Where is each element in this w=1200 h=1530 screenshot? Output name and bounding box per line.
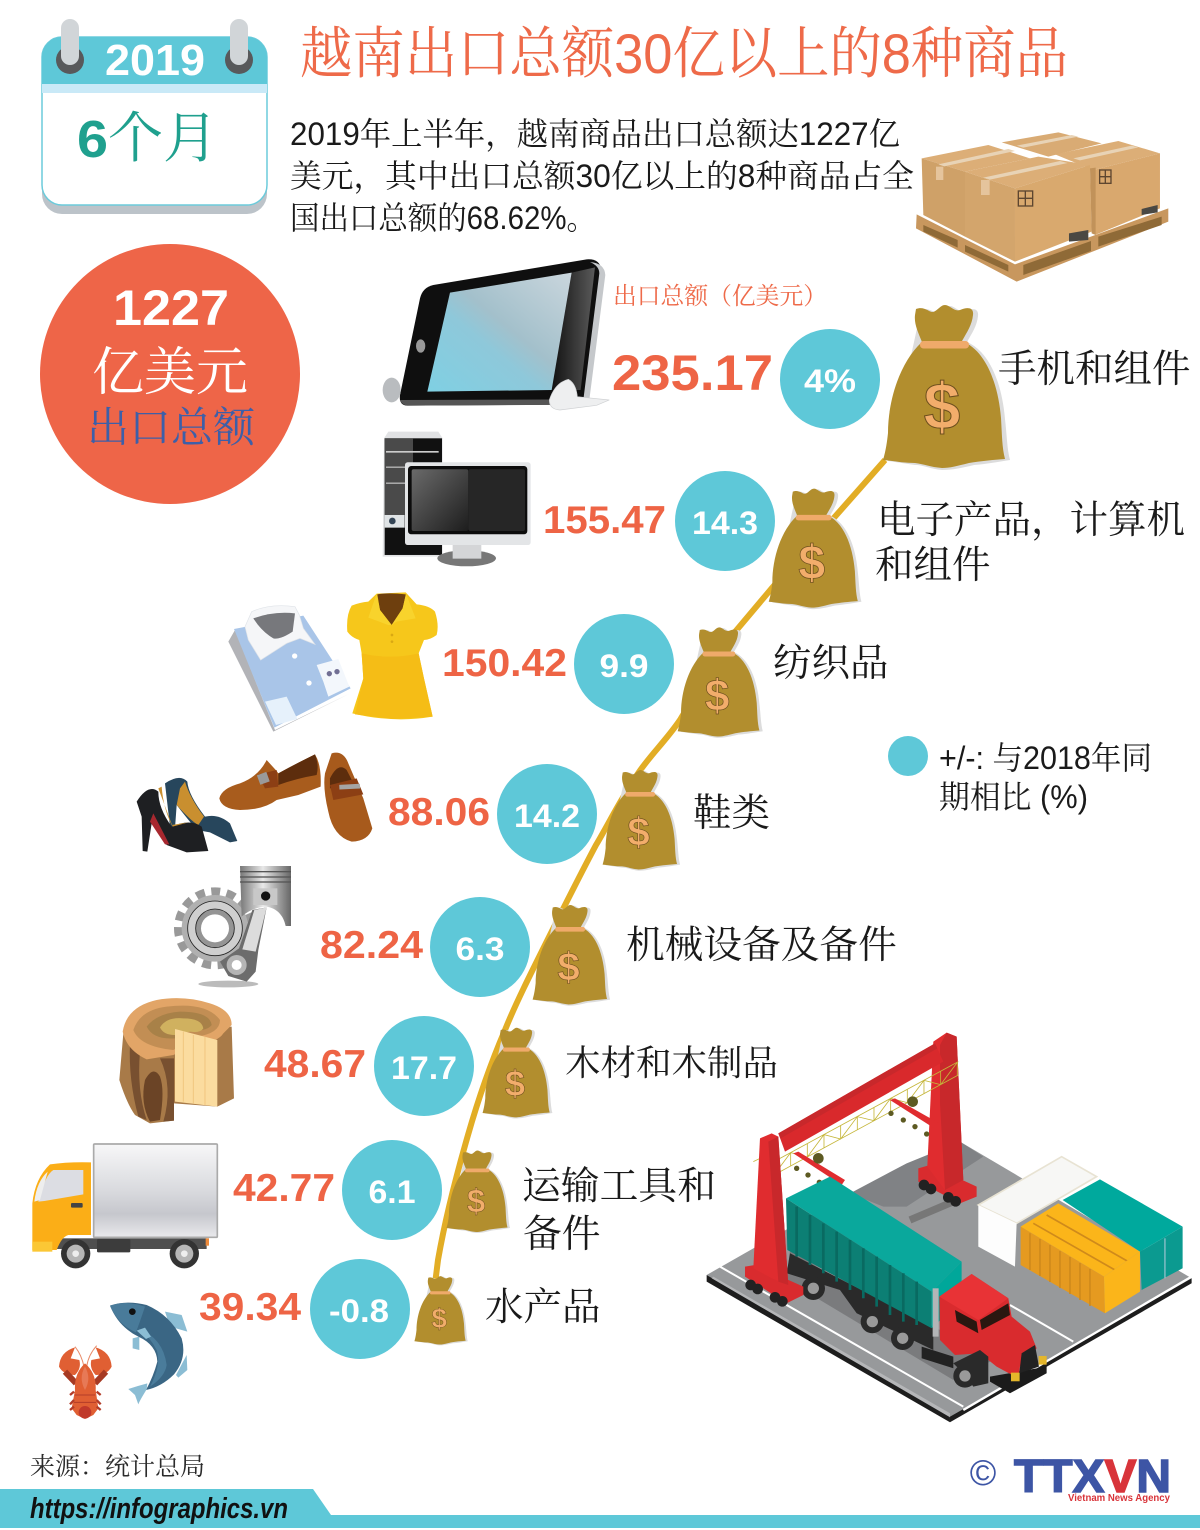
item: 电子产品，计算机和组件: 14.3 <box>692 505 758 541</box>
item: 机械设备及备件 <box>320 897 897 1006</box>
item: 水产品: 水产品 <box>485 1286 601 1329</box>
item: 手机和组件: 手机和组件 <box>998 348 1191 391</box>
item: 水产品: $ <box>431 1303 447 1334</box>
icon: calendar: 6 <box>77 111 108 169</box>
text block: intro <box>290 116 914 236</box>
item: 水产品: 39.34 <box>199 1286 301 1329</box>
icon: wood log <box>119 998 234 1123</box>
icon: calendar <box>42 19 267 214</box>
item: 纺织品: $ <box>705 671 729 720</box>
item: 机械设备及备件: $ <box>557 945 580 990</box>
item: 运输工具和备件: 6.1 <box>368 1174 416 1210</box>
title: 越南出口总额30亿以上的8种商品 <box>300 22 1068 85</box>
item: 运输工具和备件: $ <box>467 1182 485 1220</box>
legend <box>888 736 1152 815</box>
logo: TTXVN: © <box>970 1452 996 1493</box>
panel: total exports circle: 1227 <box>113 280 229 336</box>
item: 运输工具和备件: 备件 <box>523 1213 601 1256</box>
item: 电子产品，计算机和组件 <box>543 471 1185 609</box>
item: 电子产品，计算机和组件: 电子产品，计算机 <box>877 499 1185 542</box>
icon: desktop computer <box>383 432 531 566</box>
panel: total exports circle: 出口总额 <box>87 404 256 451</box>
item: 电子产品，计算机和组件: $ <box>798 536 825 590</box>
item: 运输工具和备件 <box>233 1140 716 1256</box>
item: 机械设备及备件: 6.3 <box>456 931 504 967</box>
item: 木材和木制品: 48.67 <box>264 1043 366 1086</box>
item: 木材和木制品 <box>264 1016 778 1118</box>
icon: blue shirt and yellow polo <box>228 592 438 732</box>
item: 电子产品，计算机和组件: 155.47 <box>543 499 666 542</box>
legend: +/-: 与2018年同 <box>939 740 1152 776</box>
item: 手机和组件: $ <box>924 369 960 443</box>
icon: delivery truck <box>32 1144 217 1268</box>
item: 水产品: -0.8 <box>329 1293 389 1329</box>
footer bar <box>0 1489 1200 1528</box>
icon: cardboard boxes on pallet <box>916 132 1168 282</box>
item: 手机和组件: 4% <box>804 363 856 399</box>
item: 鞋类: 14.2 <box>514 798 580 834</box>
item: 机械设备及备件: 机械设备及备件 <box>626 924 897 967</box>
logo: TTXVN: TTXVN <box>1014 1450 1171 1502</box>
panel: total exports circle <box>40 244 300 504</box>
illustration: port crane, truck and containers <box>707 1033 1192 1422</box>
item: 纺织品: 纺织品 <box>773 642 889 685</box>
item: 电子产品，计算机和组件: 和组件 <box>875 544 991 587</box>
item: 手机和组件 <box>612 305 1191 470</box>
icon: calendar: 个月 <box>108 107 218 169</box>
item: 运输工具和备件: 42.77 <box>233 1167 335 1210</box>
logo: TTXVN: Vietnam News Agency <box>1068 1492 1170 1504</box>
text block: intro: 美元，其中出口总额30亿以上的8种商品占全 <box>290 158 914 194</box>
item: 纺织品: 150.42 <box>442 642 567 685</box>
chart: growth line <box>433 460 885 1300</box>
item: 纺织品: 9.9 <box>600 648 648 684</box>
icon: shoes <box>137 753 372 852</box>
item: 鞋类: 88.06 <box>388 791 490 834</box>
text block: intro: 国出口总额的68.62%。 <box>290 200 596 236</box>
icon: gear and piston <box>179 866 291 987</box>
item: 运输工具和备件: 运输工具和 <box>522 1165 716 1208</box>
axis label: export total unit: 出口总额（亿美元） <box>613 283 827 310</box>
item: 纺织品 <box>442 614 889 738</box>
item: 手机和组件: 235.17 <box>612 345 773 401</box>
text block: intro: 2019年上半年，越南商品出口总额达1227亿 <box>290 116 900 152</box>
icon: calendar: 2019 <box>105 36 205 85</box>
item: 木材和木制品: $ <box>505 1063 525 1104</box>
panel: total exports circle: 亿美元 <box>92 344 248 402</box>
item: 木材和木制品: 木材和木制品 <box>565 1043 778 1083</box>
icon: tablet and earphones <box>383 259 609 410</box>
item: 鞋类: $ <box>627 810 650 855</box>
icon: fish and lobster <box>59 1303 187 1419</box>
item: 鞋类: 鞋类 <box>693 792 770 835</box>
item: 鞋类 <box>388 764 770 871</box>
item: 机械设备及备件: 82.24 <box>320 924 423 967</box>
item: 水产品 <box>199 1259 601 1359</box>
footer url: https://infographics.vn <box>30 1493 288 1525</box>
item: 木材和木制品: 17.7 <box>391 1050 457 1086</box>
legend: 期相比 (%) <box>939 779 1088 815</box>
source: 来源：统计总局 <box>30 1453 205 1481</box>
